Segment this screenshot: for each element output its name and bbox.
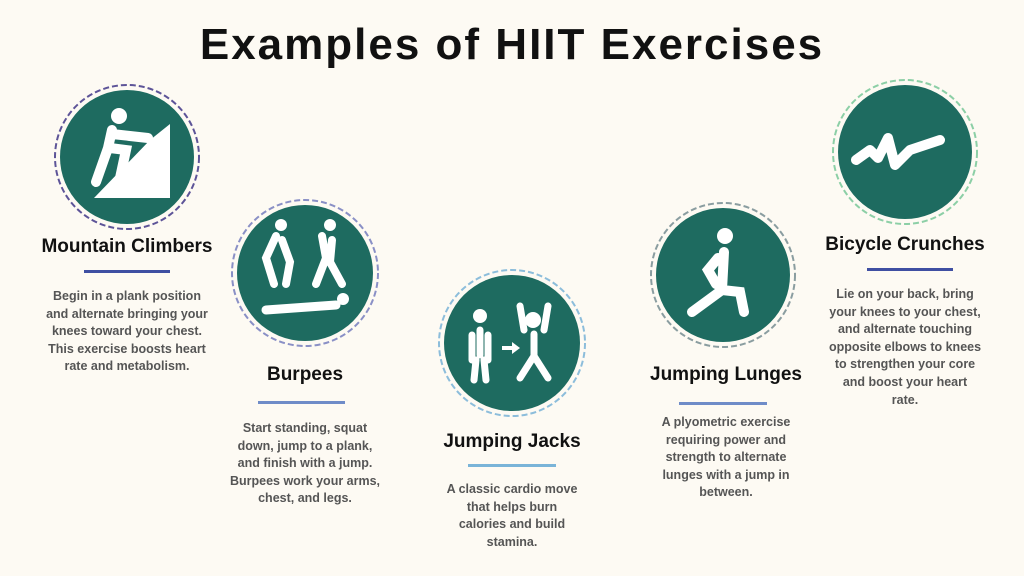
panel: jumping lunges: Jumping Lunges bbox=[650, 364, 802, 385]
panel: burpees bbox=[230, 364, 380, 505]
icon: bicycle crunches bbox=[833, 80, 977, 224]
panel: burpees: Burpees work your arms, bbox=[230, 474, 380, 488]
panel: jumping lunges: strength to alternate bbox=[666, 450, 786, 464]
panel: jumping jacks bbox=[443, 431, 581, 549]
icon: mountain climbers bbox=[55, 85, 199, 229]
icon: jumping jacks bbox=[439, 270, 585, 416]
title: Examples of HIIT Exercises bbox=[200, 20, 824, 69]
panel: jumping lunges: requiring power and bbox=[666, 433, 786, 447]
panel: jumping lunges bbox=[650, 364, 802, 499]
panel: mountain climbers: Mountain Climbers bbox=[41, 236, 212, 257]
panel: bicycle crunches: to strengthen your core bbox=[835, 357, 975, 371]
panel: burpees: chest, and legs. bbox=[258, 491, 352, 505]
panel: jumping jacks: calories and build bbox=[459, 517, 565, 531]
panel: bicycle crunches: your knees to your chest, bbox=[829, 305, 981, 319]
icon: jumping lunges bbox=[651, 203, 795, 347]
panel: mountain climbers: knees toward your chest. bbox=[52, 324, 202, 338]
panel: burpees: Start standing, squat bbox=[243, 421, 367, 435]
panel: mountain climbers: rate and metabolism. bbox=[64, 359, 190, 373]
panel: jumping jacks: Jumping Jacks bbox=[443, 431, 581, 452]
panel: mountain climbers: This exercise boosts heart bbox=[48, 342, 206, 356]
panel: bicycle crunches: opposite elbows to knees bbox=[829, 340, 981, 354]
panel: mountain climbers bbox=[41, 236, 212, 373]
panel: bicycle crunches: and boost your heart bbox=[843, 375, 967, 389]
panel: bicycle crunches: Bicycle Crunches bbox=[825, 234, 985, 255]
panel: burpees: Burpees bbox=[267, 364, 343, 385]
panel: jumping lunges: between. bbox=[699, 485, 753, 499]
panel: jumping jacks: A classic cardio move bbox=[447, 482, 577, 496]
panel: jumping jacks: that helps burn bbox=[467, 500, 557, 514]
panel: bicycle crunches: rate. bbox=[892, 393, 918, 407]
panel: bicycle crunches bbox=[825, 234, 985, 407]
icon: burpees bbox=[232, 200, 378, 346]
panel: jumping lunges: A plyometric exercise bbox=[662, 415, 790, 429]
panel: jumping jacks: stamina. bbox=[487, 535, 537, 549]
panel: mountain climbers: Begin in a plank position bbox=[53, 289, 201, 303]
panel: bicycle crunches: Lie on your back, bring bbox=[836, 287, 974, 301]
panel: bicycle crunches: and alternate touching bbox=[838, 322, 972, 336]
panel: burpees: down, jump to a plank, bbox=[238, 439, 372, 453]
panel: jumping lunges: lunges with a jump in bbox=[662, 468, 790, 482]
panel: mountain climbers: and alternate bringing your bbox=[46, 307, 208, 321]
panel: burpees: and finish with a jump. bbox=[238, 456, 372, 470]
